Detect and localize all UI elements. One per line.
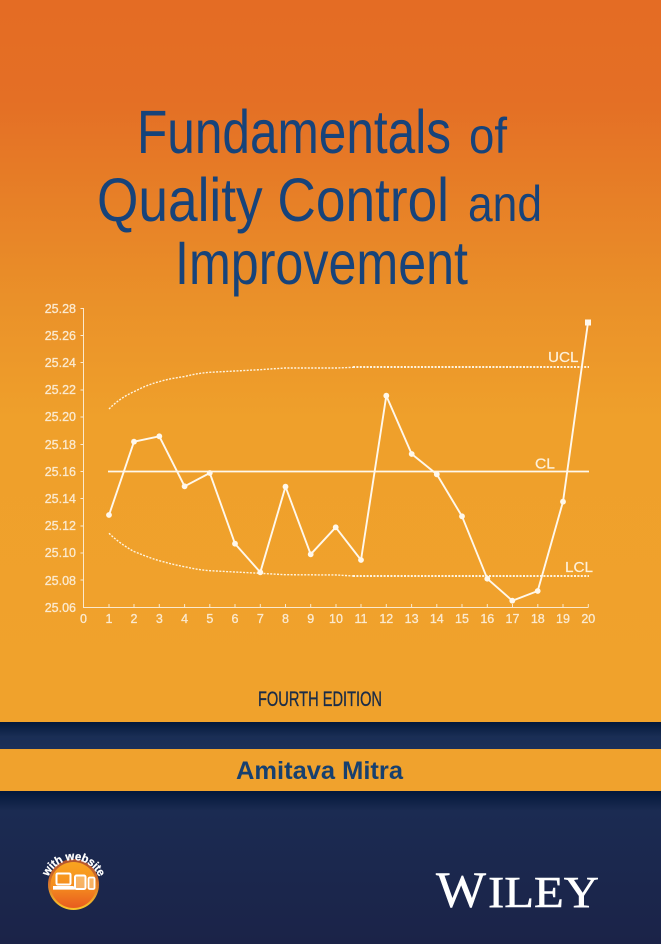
author name: Amitava Mitra xyxy=(236,757,404,785)
x axis labels: 10 xyxy=(329,612,343,626)
x axis labels: 4 xyxy=(181,612,188,626)
background xyxy=(0,0,661,722)
title: Fundamentals xyxy=(137,98,451,166)
x axis labels: 7 xyxy=(257,612,264,626)
center line xyxy=(108,470,589,472)
author band xyxy=(0,749,661,791)
x axis labels: 5 xyxy=(206,612,213,626)
title: Improvement xyxy=(175,229,468,297)
y axis labels: 25.14 xyxy=(45,492,76,506)
y axis labels xyxy=(45,302,76,615)
badge text: with website xyxy=(42,853,104,876)
publisher logo: W xyxy=(436,863,487,919)
x axis labels: 18 xyxy=(531,612,545,626)
control chart xyxy=(45,302,595,626)
upper control limit xyxy=(109,367,589,409)
y axis labels: 25.22 xyxy=(45,383,76,397)
badge disc xyxy=(48,859,99,910)
publisher logo: ILEY xyxy=(488,868,599,917)
footer panel xyxy=(0,791,661,944)
y axis labels: 25.28 xyxy=(45,302,76,316)
limit labels: UCL xyxy=(548,349,578,366)
y axis labels: 25.08 xyxy=(45,574,76,588)
data points xyxy=(106,320,591,604)
x axis labels: 11 xyxy=(355,612,368,626)
navy band xyxy=(0,722,661,749)
website badge xyxy=(42,853,104,910)
icon: tablet xyxy=(75,876,86,889)
icon: laptop xyxy=(53,874,75,890)
limit labels xyxy=(535,349,593,576)
x axis labels: 14 xyxy=(430,612,444,626)
x axis labels: 1 xyxy=(106,612,113,626)
x axis labels: 15 xyxy=(455,612,469,626)
limit labels: LCL xyxy=(565,559,593,576)
x axis labels: 17 xyxy=(506,612,519,626)
icon: phone xyxy=(88,878,94,889)
title xyxy=(97,98,542,297)
edition label: FOURTH EDITION xyxy=(258,687,382,711)
x axis labels: 0 xyxy=(80,612,87,626)
x axis labels: 12 xyxy=(379,612,393,626)
x axis labels: 9 xyxy=(307,612,314,626)
x axis labels: 3 xyxy=(156,612,163,626)
y axis labels: 25.06 xyxy=(45,601,76,615)
limit labels: CL xyxy=(535,456,555,472)
y axis labels: 25.12 xyxy=(45,519,76,533)
y axis labels: 25.16 xyxy=(45,465,76,479)
axes xyxy=(80,308,588,608)
x axis labels: 13 xyxy=(405,612,419,626)
y axis labels: 25.24 xyxy=(45,356,76,370)
lower control limit xyxy=(109,533,589,576)
y axis labels: 25.18 xyxy=(45,438,76,452)
x axis labels xyxy=(80,612,595,626)
x axis labels: 8 xyxy=(282,612,289,626)
title: and xyxy=(468,176,542,232)
y axis labels: 25.26 xyxy=(45,329,76,343)
title: Quality Control xyxy=(97,166,449,234)
y axis labels: 25.10 xyxy=(45,546,76,560)
data line xyxy=(109,322,588,601)
x axis labels: 20 xyxy=(581,612,595,626)
title: of xyxy=(469,108,507,164)
x axis labels: 19 xyxy=(556,612,570,626)
publisher logo xyxy=(436,863,599,919)
x axis labels: 2 xyxy=(131,612,138,626)
x axis labels: 6 xyxy=(232,612,239,626)
x axis labels: 16 xyxy=(480,612,494,626)
y axis labels: 25.20 xyxy=(45,410,76,424)
